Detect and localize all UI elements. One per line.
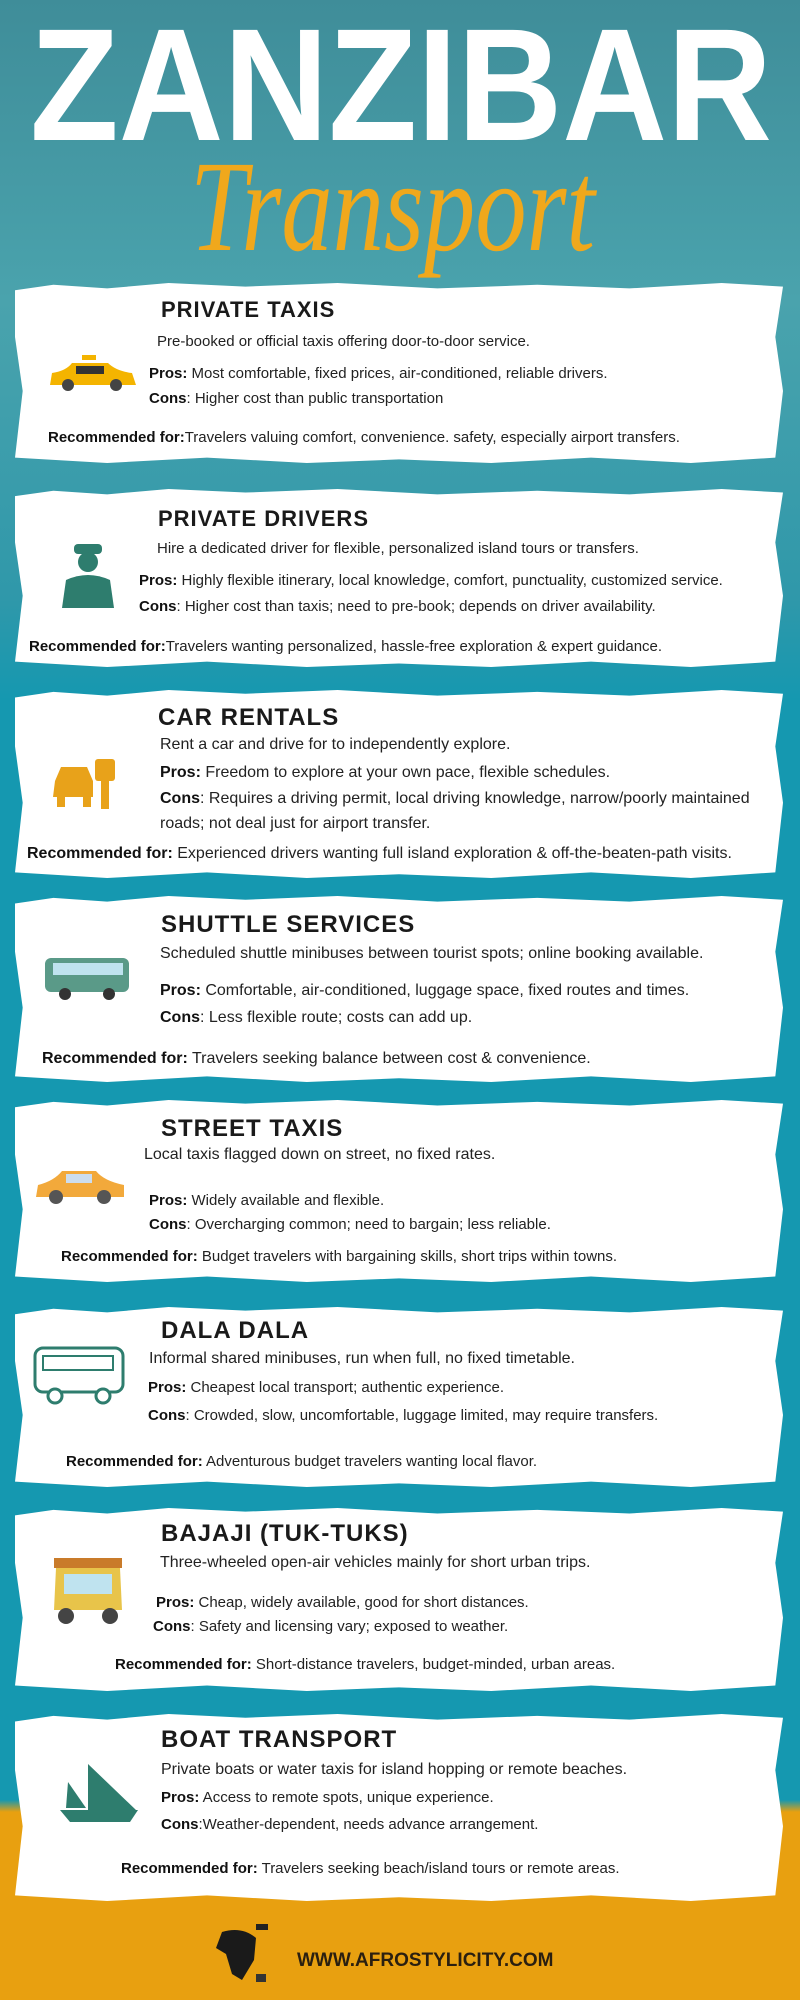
icon: taxi <box>50 355 136 391</box>
text: Pros: Comfortable, air-conditioned, luggage space, fixed routes and times. <box>160 982 689 999</box>
text: Three-wheeled open-air vehicles mainly for short urban trips. <box>160 1554 590 1571</box>
text: Recommended for: Experienced drivers wanting full island exploration & off-the-beaten-path visits. <box>27 845 732 862</box>
text: Pros: Freedom to explore at your own pace, flexible schedules. <box>160 764 610 781</box>
text: Cons:Weather-dependent, needs advance arrangement. <box>161 1816 538 1833</box>
text: Recommended for:Travelers valuing comfort, convenience. safety, especially airport transfers. <box>48 429 680 446</box>
text: Cons: Requires a driving permit, local driving knowledge, narrow/poorly maintained <box>160 790 750 807</box>
text: Recommended for: Travelers seeking beach/island tours or remote areas. <box>121 1860 620 1877</box>
text: Hire a dedicated driver for flexible, personalized island tours or transfers. <box>157 540 639 557</box>
text: Cons: Overcharging common; need to bargain; less reliable. <box>149 1216 551 1233</box>
text: Cons: Higher cost than public transportation <box>149 390 443 407</box>
text: BAJAJI (TUK-TUKS) <box>161 1520 409 1547</box>
text: Recommended for: Budget travelers with bargaining skills, short trips within towns. <box>61 1248 617 1265</box>
text: Cons: Crowded, slow, uncomfortable, luggage limited, may require transfers. <box>148 1407 658 1424</box>
text: Local taxis flagged down on street, no fixed rates. <box>144 1146 495 1163</box>
text: roads; not deal just for airport transfer. <box>160 815 430 832</box>
panel: car rentals <box>15 690 783 878</box>
text: Pros: Access to remote spots, unique experience. <box>161 1789 494 1806</box>
header title <box>30 0 772 279</box>
text: shuttle services <box>42 911 703 1067</box>
text: bajaji <box>115 1520 615 1673</box>
text: PRIVATE DRIVERS <box>158 506 369 531</box>
footer url: WWW.AFROSTYLICITY.COM <box>297 1950 553 1971</box>
text: Cons: Safety and licensing vary; exposed to weather. <box>153 1618 508 1635</box>
icon: tuk-tuk <box>54 1558 122 1624</box>
text: Cons: Less flexible route; costs can add up. <box>160 1009 472 1026</box>
panel: private taxis <box>15 283 783 463</box>
text: Rent a car and drive for to independently explore. <box>160 736 510 753</box>
text: Pros: Highly flexible itinerary, local knowledge, comfort, punctuality, customized service. <box>139 572 723 589</box>
text: private drivers <box>29 506 723 655</box>
text: Recommended for:Travelers wanting personalized, hassle-free exploration & expert guidance. <box>29 638 662 655</box>
text: PRIVATE TAXIS <box>161 297 335 322</box>
text: BOAT TRANSPORT <box>161 1726 397 1753</box>
text: CAR RENTALS <box>158 704 339 731</box>
panel: private drivers <box>15 489 783 667</box>
text: car rentals <box>27 704 750 862</box>
text: Recommended for: Short-distance travelers, budget-minded, urban areas. <box>115 1656 615 1673</box>
text: dala dala <box>66 1317 658 1470</box>
icon: car and key <box>53 759 115 809</box>
text: Pre-booked or official taxis offering door-to-door service. <box>157 333 530 350</box>
text: Cons: Higher cost than taxis; need to pre-book; depends on driver availability. <box>139 598 656 615</box>
text: Pros: Widely available and flexible. <box>149 1192 384 1209</box>
text: street taxis <box>61 1115 617 1265</box>
text: Pros: Cheap, widely available, good for short distances. <box>156 1594 529 1611</box>
icon: street taxi <box>36 1171 124 1204</box>
text: Recommended for: Adventurous budget travelers wanting local flavor. <box>66 1453 537 1470</box>
text: STREET TAXIS <box>161 1115 343 1142</box>
text: SHUTTLE SERVICES <box>161 911 415 938</box>
text: Pros: Most comfortable, fixed prices, air-conditioned, reliable drivers. <box>149 365 608 382</box>
panel: bajaji <box>15 1508 783 1691</box>
footer logo <box>216 1924 268 1982</box>
text: private taxis <box>48 297 680 446</box>
text: boat transport <box>121 1726 627 1877</box>
panel: dala dala <box>15 1307 783 1487</box>
icon: dala dala minibus <box>34 1346 124 1404</box>
text: Recommended for: Travelers seeking balance between cost & convenience. <box>42 1050 591 1067</box>
header title: Transport <box>190 135 597 279</box>
panel: shuttle services <box>15 896 783 1082</box>
text: Informal shared minibuses, run when full, no fixed timetable. <box>149 1350 575 1367</box>
text: Pros: Cheapest local transport; authentic experience. <box>148 1379 504 1396</box>
panel: street taxis <box>15 1100 783 1282</box>
panel: boat transport <box>15 1714 783 1901</box>
text: Private boats or water taxis for island hopping or remote beaches. <box>161 1761 627 1778</box>
icon: driver <box>62 544 114 608</box>
icon: bus <box>45 958 129 1000</box>
icon: dhow boat <box>60 1764 138 1822</box>
text: DALA DALA <box>161 1317 309 1344</box>
text: Scheduled shuttle minibuses between tourist spots; online booking available. <box>160 945 703 962</box>
